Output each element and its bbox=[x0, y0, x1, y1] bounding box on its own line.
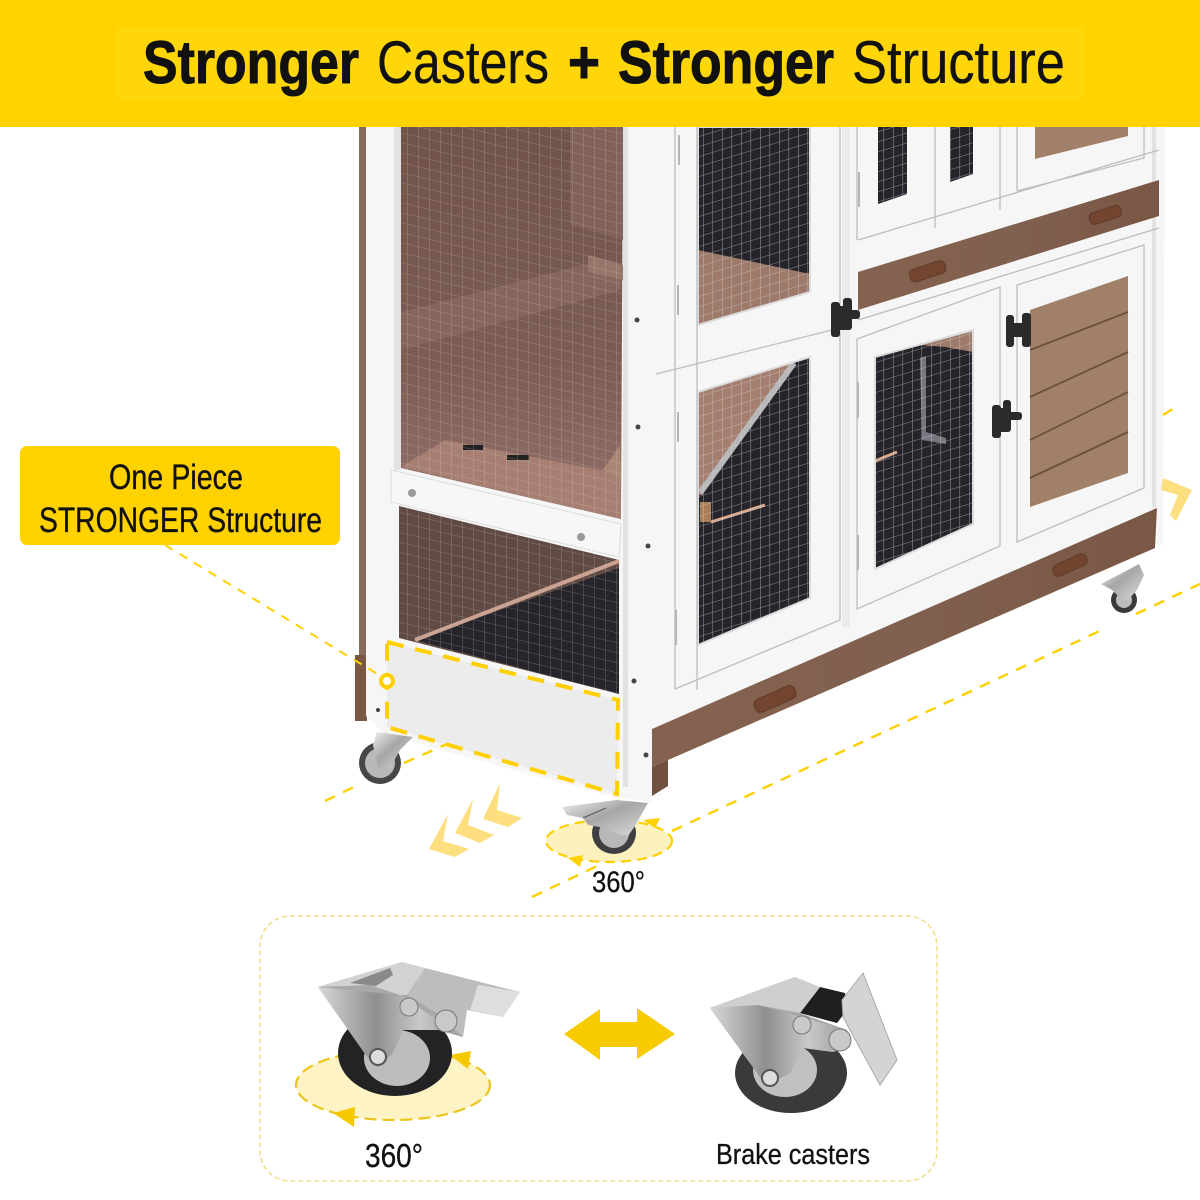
label: 360: 360° bbox=[365, 1137, 423, 1174]
drawer strip bbox=[858, 180, 1159, 310]
door outlines bbox=[656, 127, 1159, 690]
title: Casters bbox=[377, 29, 549, 96]
header band bbox=[0, 0, 1200, 127]
360 caster with rotation ellipse bbox=[296, 962, 520, 1127]
double arrow bbox=[564, 1008, 675, 1060]
top small windows bbox=[878, 127, 973, 204]
lower left window bbox=[698, 357, 810, 645]
dashed structure highlight bbox=[387, 642, 618, 794]
title: Stronger bbox=[143, 29, 359, 96]
left caster bbox=[359, 732, 413, 784]
callout box bbox=[20, 446, 340, 545]
label: 360 degrees: 360° bbox=[592, 866, 645, 899]
latches bbox=[831, 298, 1031, 438]
white frame silhouette bbox=[366, 127, 1165, 802]
callout box: STRONGER Structure bbox=[39, 501, 322, 540]
title: Stronger bbox=[618, 29, 834, 96]
side upper mesh bbox=[401, 127, 623, 519]
white base plate bbox=[387, 642, 618, 794]
hutch photo bbox=[355, 127, 1165, 802]
post shading bbox=[394, 127, 1156, 787]
front caster bbox=[562, 800, 648, 854]
front windows bbox=[698, 127, 973, 645]
title bbox=[143, 29, 1065, 96]
callout box: One Piece bbox=[109, 458, 243, 497]
wood panels bbox=[1030, 127, 1128, 507]
rotation ellipse with front caster bbox=[546, 800, 672, 867]
side lower mesh bbox=[399, 506, 619, 694]
base beam bbox=[652, 508, 1157, 796]
callout pointer line bbox=[165, 545, 384, 678]
caster comparison panel bbox=[260, 916, 937, 1181]
side crossbar bbox=[391, 470, 621, 557]
brake caster bbox=[710, 973, 897, 1113]
direction chevron right bbox=[1161, 478, 1192, 521]
callout marker bbox=[381, 675, 393, 687]
screws bbox=[376, 318, 650, 758]
title: + bbox=[568, 29, 600, 96]
guide lines bbox=[325, 405, 1200, 897]
upper left window bbox=[698, 127, 810, 325]
hinges bbox=[675, 135, 860, 645]
lower middle window bbox=[875, 330, 973, 569]
label: brake casters: Brake casters bbox=[716, 1139, 870, 1171]
direction chevrons left bbox=[429, 783, 522, 857]
title: Structure bbox=[852, 29, 1065, 96]
rear brown edge bbox=[355, 127, 367, 721]
right rear caster bbox=[1101, 564, 1144, 613]
